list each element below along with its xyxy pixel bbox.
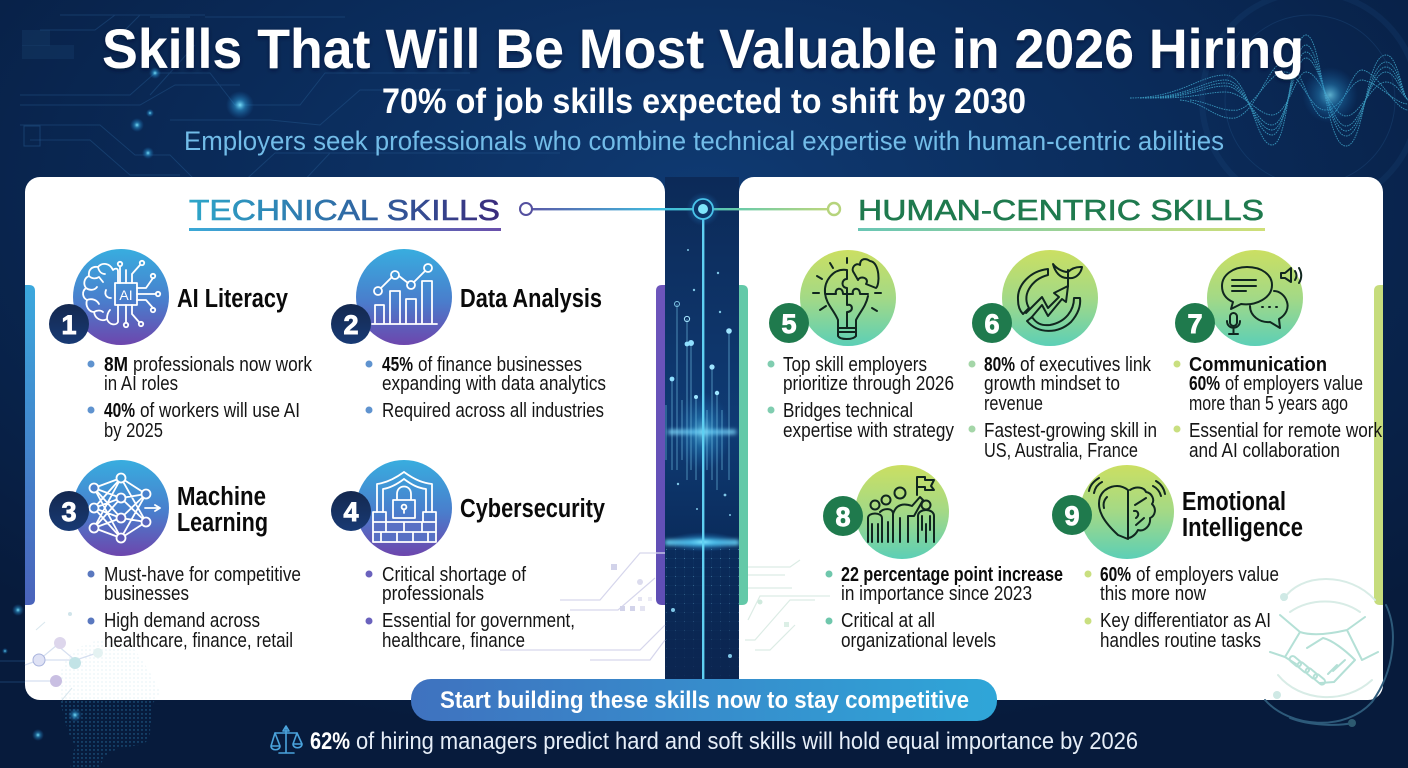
skill 3: Machine Learning [49,460,301,652]
central light column [665,177,739,682]
bullets: in AI roles [104,373,178,395]
bullets: 40% [104,400,135,422]
heading: Cybersecurity: Cybersecurity [460,495,606,523]
bullets [88,564,301,652]
bullets: 45% [382,354,413,376]
icon: balance scale [271,726,302,753]
bullets: this more now [1100,583,1206,605]
bullets [88,354,313,442]
connector between headings [520,192,840,226]
badge 1: 1 [61,310,77,340]
icon: bar chart [356,249,452,345]
side accent: technical right [656,285,665,605]
bullets: organizational levels [841,630,996,652]
side accent: human right [1374,285,1383,605]
icon: growth arrow and sprout [1002,250,1098,346]
side accent: technical left [25,285,35,605]
bullets: 60% [1100,564,1131,586]
bullets: and AI collaboration [1189,440,1340,462]
icon: team with flag [855,465,949,559]
skill 7: communication [1174,250,1383,462]
bullets: of finance businesses [418,354,582,376]
bullets: 60% [1189,373,1220,395]
badge 4 [331,491,371,531]
icon: puzzle light bulb [800,250,896,346]
badge 8 [823,496,863,536]
badge 8: 8 [835,502,851,532]
bullets: of workers will use AI [140,400,300,422]
bullets: healthcare, finance, retail [104,630,293,652]
footer statistic: of hiring managers predict hard and soft skills will hold equal importance by 2026 [356,728,1138,755]
bullets: more than 5 years ago [1189,393,1348,415]
bullets: handles routine tasks [1100,630,1261,652]
badge 3: 3 [61,497,77,527]
call to action pill: Start building these skills now to stay competitive [440,687,969,714]
bullets: expanding with data analytics [382,373,606,395]
decoration: top-right sound wave [1130,0,1408,208]
bullets: 80% [984,354,1015,376]
badge 7 [1175,303,1215,343]
side accent: human left [739,285,748,605]
icon: neural network [73,460,169,556]
icon: heart and brain [1080,465,1174,559]
badge 2 [331,304,371,344]
title: Skills That Will Be Most Valuable in 2026 Hiring [102,17,1304,80]
footer statistic: 62% [310,728,350,755]
decoration: panel circuit traces [500,553,830,660]
badge 5: 5 [781,309,797,339]
decoration: handshake [1265,579,1393,727]
bullets: Communication [1189,354,1327,376]
bullets: High demand across [104,610,260,632]
bullets: of executives link [1020,354,1152,376]
bullets [1084,564,1279,652]
bullets: businesses [104,583,189,605]
icon: speech bubbles [1207,250,1303,346]
bullets: US, Australia, France [984,440,1138,462]
heading: Emotional Intelligence: Intelligence [1182,514,1303,542]
bullets: in importance since 2023 [841,583,1032,605]
bullets: Required across all industries [382,400,604,422]
bullets [1174,354,1383,462]
bullets: Essential for remote work [1189,420,1383,442]
heading: Machine Learning: Machine [177,483,266,511]
bullets: professionals now work [133,354,313,376]
heading: Machine Learning [177,483,268,537]
skill 5: strategic thinking [768,250,954,442]
badge 6 [972,303,1012,343]
bullets: 8M [104,354,128,376]
bullets: professionals [382,583,484,605]
heading: human-centric skills: HUMAN-CENTRIC SKILLS [858,195,1264,227]
badge 3 [49,491,89,531]
bullets: healthcare, finance [382,630,525,652]
badge 2: 2 [343,310,359,340]
panel: technical skills background [25,177,665,700]
skill 6: growth mindset [968,250,1157,462]
bullets: of employers value [1136,564,1279,586]
decoration: top-left circuit lines [20,15,560,230]
bullets: revenue [984,393,1043,415]
heading: technical skills: TECHNICAL SKILLS [189,195,500,227]
bullets: Fastest-growing skill in [984,420,1157,442]
badge 6: 6 [984,309,1000,339]
bullets: Critical at all [841,610,935,632]
badge 4: 4 [343,497,359,527]
skill 8: leadership [823,465,1063,652]
bullets: Bridges technical [783,400,913,422]
bullets [768,354,954,442]
skill 9: Emotional Intelligence [1052,465,1303,652]
badge 9 [1052,495,1092,535]
panel: human-centric skills background [739,177,1383,700]
skill 2: Data Analysis [331,249,606,422]
bullets: Must-have for competitive [104,564,301,586]
icon: AI brain chip [73,249,169,345]
icon: AI brain chip: AI [119,287,133,303]
bullets: Critical shortage of [382,564,526,586]
bullets: growth mindset to [984,373,1120,395]
decoration: lower-left neural face [0,604,160,768]
badge 9: 9 [1064,501,1080,531]
icon: shield and padlock [356,460,452,556]
subtitle: 70% of job skills expected to shift by 2030 [382,82,1026,121]
call to action pill [411,679,997,721]
bullets [968,354,1157,462]
bullets [366,564,575,652]
bullets: by 2025 [104,420,163,442]
bullets [366,354,606,422]
bullets: of employers value [1225,373,1363,395]
bullets [826,564,1063,652]
heading: Data Analysis: Data Analysis [460,285,602,313]
skill 4: Cybersecurity [331,460,606,652]
heading: Emotional Intelligence: Emotional [1182,488,1286,516]
bullets: Essential for government, [382,610,575,632]
badge 7: 7 [1187,309,1203,339]
bullets: expertise with strategy [783,420,954,442]
bullets: prioritize through 2026 [783,373,954,395]
bullets: Key differentiator as AI [1100,610,1271,632]
tagline: Employers seek professionals who combine technical expertise with human-centric abilities [184,126,1224,156]
heading: Machine Learning: Learning [177,509,268,537]
badge 1 [49,304,89,344]
skill 1: AI Literacy [49,249,313,442]
heading: AI Literacy: AI Literacy [177,285,289,313]
heading: Emotional Intelligence [1182,488,1303,542]
badge 5 [769,303,809,343]
bullets: Top skill employers [783,354,927,376]
bullets: 22 percentage point increase [841,564,1063,586]
